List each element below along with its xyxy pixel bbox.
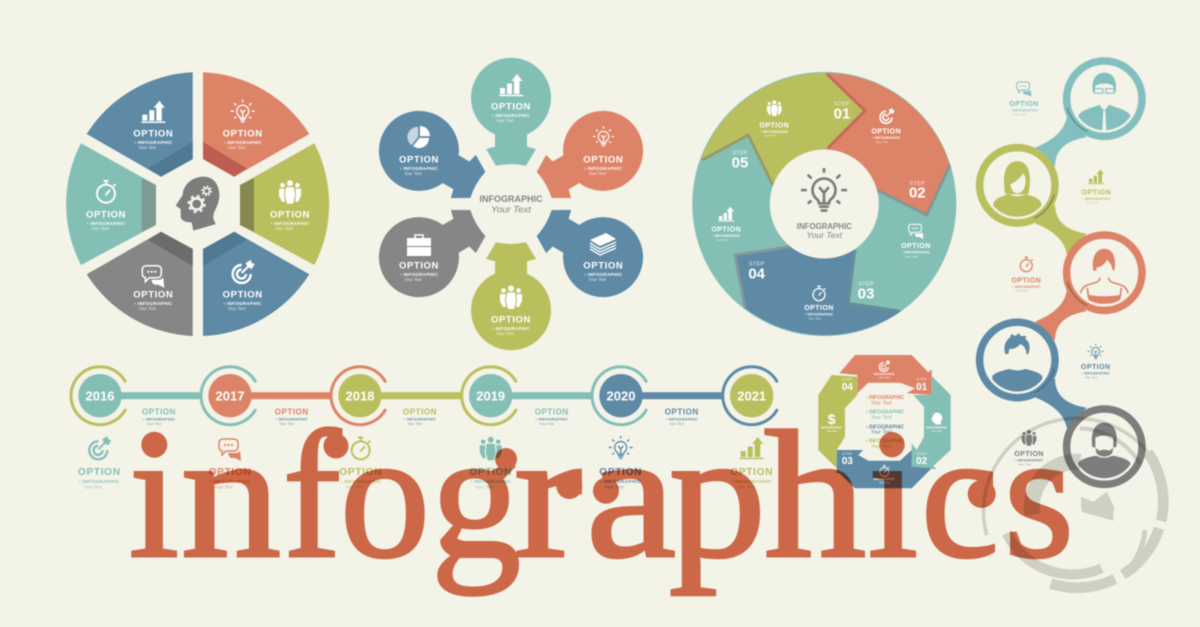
panel: octagon cycle	[818, 355, 951, 488]
node 2021: 2021	[737, 388, 766, 403]
centre list: › INFOGRAPHIC	[866, 410, 904, 416]
timeline bars	[120, 392, 724, 399]
icon: stopwatch	[880, 466, 889, 476]
label: option under 2017: Your Text	[214, 484, 233, 489]
centre title	[797, 222, 852, 240]
panel: six petal flower	[364, 58, 658, 350]
icon: bulb	[593, 126, 614, 146]
icon: money	[590, 233, 616, 255]
label: option under 2020	[599, 467, 642, 489]
label: option under 2019: OPTION	[469, 467, 512, 478]
label: between 2019 and 2020	[535, 407, 569, 426]
petal top right	[524, 96, 658, 219]
label: option under 2016: OPTION	[78, 467, 121, 478]
centre list: › INFOGRAPHIC	[866, 395, 904, 401]
icon: head with gears	[176, 177, 219, 231]
icon: people	[480, 437, 502, 460]
label: step 05 option: Your Text	[715, 238, 728, 242]
label: step 04 option: › INFOGRAPHIC	[805, 313, 834, 317]
icon: stopwatch	[352, 438, 370, 459]
label: option bottom left	[133, 289, 173, 311]
infographic artwork	[66, 56, 1169, 598]
label: option top right: OPTION	[223, 129, 263, 140]
label: olive option: › INFOGRAPHIC	[1082, 197, 1111, 201]
segment top right	[203, 72, 309, 177]
label: step 02 option: OPTION	[872, 129, 901, 136]
step 01 olive arrow	[701, 73, 863, 185]
label: grey option: › INFOGRAPHIC	[1015, 459, 1044, 463]
disc	[692, 72, 956, 336]
label: between 2017 and 2018: OPTION	[275, 407, 309, 416]
icon: chart	[718, 207, 734, 221]
icon: stopwatch	[97, 181, 116, 203]
label: option bottom: OPTION	[491, 315, 531, 326]
centre title: Your Text	[806, 230, 843, 240]
connector orange	[1035, 291, 1087, 341]
label: step 02 option: Your Text	[875, 140, 888, 144]
label: option under 2016: Your Text	[83, 484, 103, 489]
label: option under 2017	[209, 467, 251, 489]
label: blue option: Your Text	[1085, 375, 1098, 379]
label: between 2018 and 2019: Your Text	[407, 422, 423, 426]
label: teal caption: INFOGRAPHIC	[926, 425, 948, 429]
title: infographics: c	[921, 395, 999, 596]
centre title: Your Text	[491, 204, 531, 216]
label: between 2016 and 2017: OPTION	[142, 407, 176, 416]
label: option bottom left: OPTION	[133, 289, 173, 300]
title: infographics: h	[764, 395, 866, 596]
step 04 number: STEP	[749, 262, 765, 268]
label: between 2016 and 2017: Your Text	[146, 422, 162, 426]
label: teal caption	[926, 425, 948, 433]
label: option bottom left: Your Text	[404, 277, 422, 282]
centre title	[480, 194, 543, 216]
label: blue option: OPTION	[1081, 364, 1110, 371]
label: between 2020 and 2021	[665, 407, 699, 426]
label: option left: › INFOGRAPHIC	[87, 221, 126, 226]
label: olive option	[1082, 189, 1111, 205]
label: step 03 option: › INFOGRAPHIC	[902, 251, 931, 255]
label: option under 2020: OPTION	[599, 467, 642, 478]
title: infographics: g	[431, 395, 521, 596]
icon: people	[500, 286, 522, 309]
petal top left	[364, 96, 498, 219]
label: option bottom left: OPTION	[399, 260, 439, 271]
connector blue	[1035, 378, 1087, 428]
label: option bottom right: Your Text	[228, 306, 246, 311]
label: blue caption: INFOGRAPHIC	[874, 477, 896, 481]
label: grey option	[1014, 451, 1044, 466]
node 2021	[723, 367, 777, 425]
petal bottom right	[524, 189, 658, 312]
label: option bottom right: OPTION	[583, 260, 623, 271]
icon: people	[1022, 430, 1036, 446]
label: option under 2018	[339, 467, 382, 489]
step 03 number: STEP	[858, 282, 874, 288]
panel: five step circle	[692, 72, 956, 336]
label: step 04 option	[804, 305, 834, 320]
title: infographics: p	[669, 395, 766, 596]
title: infographics	[129, 395, 1074, 596]
step numbers	[842, 378, 928, 467]
step 05 number: STEP	[732, 150, 748, 156]
label: option bottom left	[399, 260, 439, 282]
label: between 2019 and 2020: OPTION	[535, 407, 569, 416]
label: between 2020 and 2021: Your Text	[669, 422, 685, 426]
label: option top left: › INFOGRAPHIC	[400, 166, 439, 171]
centre title: INFOGRAPHIC	[797, 222, 852, 231]
label: option bottom right	[583, 260, 623, 282]
label: option top right: › INFOGRAPHIC	[584, 166, 623, 171]
label: orange caption: INFOGRAPHIC	[874, 372, 896, 376]
step 02 number: 02	[909, 184, 926, 201]
label: between 2020 and 2021: › INFOGRAPHIC	[666, 418, 698, 422]
label: option right: OPTION	[270, 209, 310, 220]
label: step 03 option: Your Text	[905, 254, 918, 258]
icon: chat	[142, 266, 164, 288]
label: teal option	[1009, 101, 1039, 116]
label: orange caption: Your Text	[879, 376, 890, 380]
panel: six segment pie	[66, 72, 329, 336]
label: option under 2018: Your Text	[345, 484, 364, 489]
label: step 01 option: › INFOGRAPHIC	[760, 130, 789, 134]
label: option top right	[583, 155, 623, 176]
label: teal option: OPTION	[1009, 101, 1039, 108]
label: blue option	[1081, 364, 1110, 379]
node 2019: 2019	[476, 388, 505, 403]
label: between 2020 and 2021: OPTION	[665, 407, 699, 416]
icon: chat	[1017, 82, 1031, 97]
label: step 05 option: › INFOGRAPHIC	[712, 234, 741, 238]
label: step 05 option: OPTION	[712, 227, 741, 234]
label: option right: Your Text	[275, 226, 293, 231]
node 2017	[201, 367, 255, 425]
step numbers: STEP	[842, 452, 853, 456]
label: option under 2017: OPTION	[209, 467, 251, 478]
label: between 2016 and 2017: › INFOGRAPHIC	[143, 418, 175, 422]
label: step 02 option	[872, 129, 901, 144]
centre list: Your Text	[871, 400, 892, 406]
label: option top left: OPTION	[133, 129, 173, 140]
label: step 01 option: OPTION	[760, 122, 789, 129]
label: option bottom left: Your Text	[138, 306, 157, 311]
label: option top right: Your Text	[588, 171, 607, 176]
label: option top: › INFOGRAPHIC	[492, 113, 531, 118]
centre disc	[770, 150, 879, 258]
label: option under 2018: › INFOGRAPHIC	[340, 479, 381, 485]
icon: head	[931, 412, 942, 424]
node 2020: 2020	[607, 388, 635, 403]
label: orange option	[1012, 277, 1041, 293]
step numbers: STEP	[917, 452, 927, 456]
label: option right	[270, 209, 310, 231]
petal bottom left	[364, 189, 498, 312]
icon: chart	[740, 437, 764, 459]
label: step 05 option	[712, 227, 741, 242]
label: option under 2019	[469, 467, 512, 489]
label: step 04 option: OPTION	[804, 305, 834, 312]
icon: chat	[219, 439, 241, 461]
step numbers: STEP	[917, 378, 927, 382]
step 04 number: 04	[748, 265, 766, 282]
label: option under 2017: › INFOGRAPHIC	[210, 479, 251, 485]
step 04 blue arrow	[735, 247, 900, 335]
label: between 2017 and 2018: Your Text	[279, 422, 295, 426]
node 2020	[592, 367, 646, 425]
label: between 2018 and 2019: OPTION	[403, 407, 437, 416]
label: option bottom left: › INFOGRAPHIC	[134, 301, 173, 306]
node 2016	[71, 367, 125, 425]
label: option under 2021: Your Text	[736, 484, 755, 489]
label: teal option: Your Text	[1013, 112, 1026, 116]
label: orange option: OPTION	[1012, 277, 1041, 284]
label: option top left	[399, 155, 439, 176]
label: option under 2019: › INFOGRAPHIC	[470, 479, 511, 485]
label: option bottom right: › INFOGRAPHIC	[224, 301, 262, 306]
connector teal	[1035, 117, 1087, 167]
title: infographics: o	[340, 395, 430, 596]
step numbers: 02	[916, 456, 928, 467]
node 2019	[462, 367, 516, 425]
label: olive option: Your Text	[1085, 201, 1098, 205]
label: orange caption	[874, 372, 896, 380]
node 2018: 2018	[346, 388, 374, 403]
arrow edge shadows	[702, 74, 950, 311]
icon: chat	[909, 224, 923, 239]
label: option under 2021	[730, 467, 773, 489]
label: option bottom: Your Text	[496, 331, 514, 336]
step 01 number: STEP	[834, 102, 850, 108]
label: option under 2016	[78, 467, 121, 489]
icon: stopwatch	[813, 286, 825, 301]
label: between 2019 and 2020: › INFOGRAPHIC	[536, 418, 568, 422]
connector olive	[1035, 204, 1087, 254]
label: olive caption: Your Text	[826, 429, 837, 433]
step 05 number: 05	[732, 154, 748, 171]
icon: chart	[499, 74, 523, 96]
label: blue caption: Your Text	[879, 480, 890, 484]
title: infographics: r	[514, 395, 582, 596]
label: option under 2019: Your Text	[475, 484, 494, 489]
centre list	[866, 395, 904, 450]
label: orange option: › INFOGRAPHIC	[1012, 285, 1041, 289]
label: step 04 option: Your Text	[808, 316, 821, 320]
step numbers: 01	[916, 382, 928, 393]
label: teal caption: Your Text	[931, 429, 942, 433]
panel: grey ring graphic	[984, 418, 1163, 588]
label: option under 2021: OPTION	[730, 467, 773, 478]
petal top	[471, 58, 551, 166]
icon: target	[89, 436, 111, 459]
icon: bulb	[1088, 344, 1104, 358]
label: option top: OPTION	[491, 101, 531, 112]
step 03 number: 03	[858, 286, 874, 303]
icon: dollar: $	[828, 411, 836, 427]
label: option bottom left: › INFOGRAPHIC	[400, 272, 439, 277]
label: option bottom: › INFOGRAPHIC	[492, 326, 531, 331]
inner shading facets	[142, 142, 254, 266]
label: step 01 option	[760, 122, 789, 138]
icon: bulb	[231, 100, 255, 122]
label: option left: OPTION	[86, 209, 126, 220]
centre title: INFOGRAPHIC	[480, 194, 543, 204]
icon: people	[279, 180, 301, 204]
segment left	[66, 143, 156, 265]
label: teal option: › INFOGRAPHIC	[1010, 109, 1039, 113]
segment bottom right	[203, 232, 309, 336]
step 01 number: 01	[834, 105, 850, 122]
avatar: woman with short hair	[1067, 235, 1142, 310]
arrow teal	[912, 376, 951, 469]
title: infographics: a	[586, 395, 676, 596]
label: option bottom right: Your Text	[588, 277, 607, 282]
label: olive caption	[821, 425, 843, 433]
label: option right: › INFOGRAPHIC	[271, 221, 310, 226]
label: grey option: OPTION	[1014, 451, 1044, 458]
avatar: woman with long hair	[980, 148, 1055, 223]
centre list: Your Text	[871, 415, 892, 421]
centre list: Your Text	[871, 444, 892, 450]
label: option top left: Your Text	[138, 145, 157, 150]
avatar: man with glasses	[1067, 61, 1142, 136]
avatar: man with beard	[1067, 409, 1142, 484]
label: option top: Your Text	[496, 118, 514, 123]
icon: stopwatch	[1020, 257, 1033, 272]
label: option top right: OPTION	[583, 155, 623, 166]
label: blue option: › INFOGRAPHIC	[1082, 372, 1110, 376]
label: olive caption: INFOGRAPHIC	[821, 425, 843, 429]
label: option under 2021: › INFOGRAPHIC	[731, 479, 772, 485]
label: option under 2016: › INFOGRAPHIC	[79, 479, 120, 485]
title: infographics: i	[868, 395, 918, 596]
label: between 2016 and 2017	[142, 407, 176, 426]
label: option top left: › INFOGRAPHIC	[134, 140, 173, 145]
label: step 03 option	[901, 243, 931, 258]
title: infographics: i	[129, 395, 179, 596]
label: option top right: › INFOGRAPHIC	[224, 140, 262, 145]
label: option left: Your Text	[91, 226, 109, 231]
label: option bottom	[491, 315, 531, 336]
label: between 2019 and 2020: Your Text	[539, 422, 555, 426]
icon: chart	[1088, 169, 1104, 184]
label: step 01 option: Your Text	[763, 134, 776, 138]
node 2016: 2016	[86, 388, 114, 403]
label: option under 2018: OPTION	[339, 467, 382, 478]
step numbers: STEP	[842, 378, 853, 382]
panel: timeline	[71, 367, 777, 489]
label: grey option: Your Text	[1018, 462, 1031, 466]
segment right	[240, 143, 329, 265]
icon: target	[233, 260, 255, 283]
label: option top left: OPTION	[399, 155, 439, 166]
node 2017: 2017	[216, 388, 244, 403]
step 02 number: STEP	[910, 181, 925, 187]
label: option bottom right: OPTION	[223, 289, 263, 300]
label: option top	[491, 101, 531, 123]
icon: target	[879, 360, 890, 372]
label: option bottom right: › INFOGRAPHIC	[584, 272, 623, 277]
label: blue caption	[874, 477, 896, 484]
segment top left	[87, 72, 193, 177]
label: option top left	[133, 129, 173, 150]
label: between 2018 and 2019: › INFOGRAPHIC	[404, 418, 436, 422]
label: step 02 option: › INFOGRAPHIC	[872, 136, 901, 140]
label: option bottom right	[223, 289, 263, 311]
label: between 2018 and 2019	[403, 407, 437, 426]
label: option top right	[223, 129, 263, 150]
petal bottom	[471, 242, 551, 350]
label: option top right: Your Text	[228, 145, 246, 150]
panel: people chain	[980, 61, 1142, 484]
step numbers: 03	[842, 456, 853, 467]
label: between 2017 and 2018	[275, 407, 309, 426]
title: infographics: f	[283, 395, 341, 596]
title: infographics: n	[181, 395, 281, 596]
icon: bulb	[609, 436, 633, 458]
icon: centre bulb	[801, 168, 847, 211]
segment bottom left	[87, 232, 193, 336]
label: between 2017 and 2018: › INFOGRAPHIC	[276, 418, 308, 422]
label: olive option: OPTION	[1082, 189, 1111, 196]
arrow blue	[837, 450, 932, 488]
arrow olive	[818, 375, 857, 468]
centre list: › INFOGRAPHIC	[866, 439, 904, 445]
icon: pie chart	[407, 126, 430, 148]
arrow orange	[839, 355, 932, 395]
step 02 orange arrow	[825, 73, 950, 215]
node 2018	[331, 367, 385, 425]
icon: target	[880, 108, 895, 123]
label: option under 2020: › INFOGRAPHIC	[600, 479, 641, 485]
label: option left	[86, 209, 126, 231]
label: option under 2020: Your Text	[605, 484, 624, 489]
centre list: › INFOGRAPHIC	[866, 424, 904, 430]
title: infographics: s	[1004, 395, 1074, 596]
centre list: Your Text	[871, 430, 892, 436]
avatar: man with spiky hair	[980, 322, 1055, 398]
step numbers: 04	[842, 382, 853, 393]
label: option top left: Your Text	[404, 171, 422, 176]
icon: people	[767, 100, 782, 116]
label: orange option: Your Text	[1015, 289, 1028, 293]
icon: chart	[141, 101, 165, 123]
icon: briefcase	[407, 235, 431, 256]
label: step 03 option: OPTION	[901, 243, 931, 250]
